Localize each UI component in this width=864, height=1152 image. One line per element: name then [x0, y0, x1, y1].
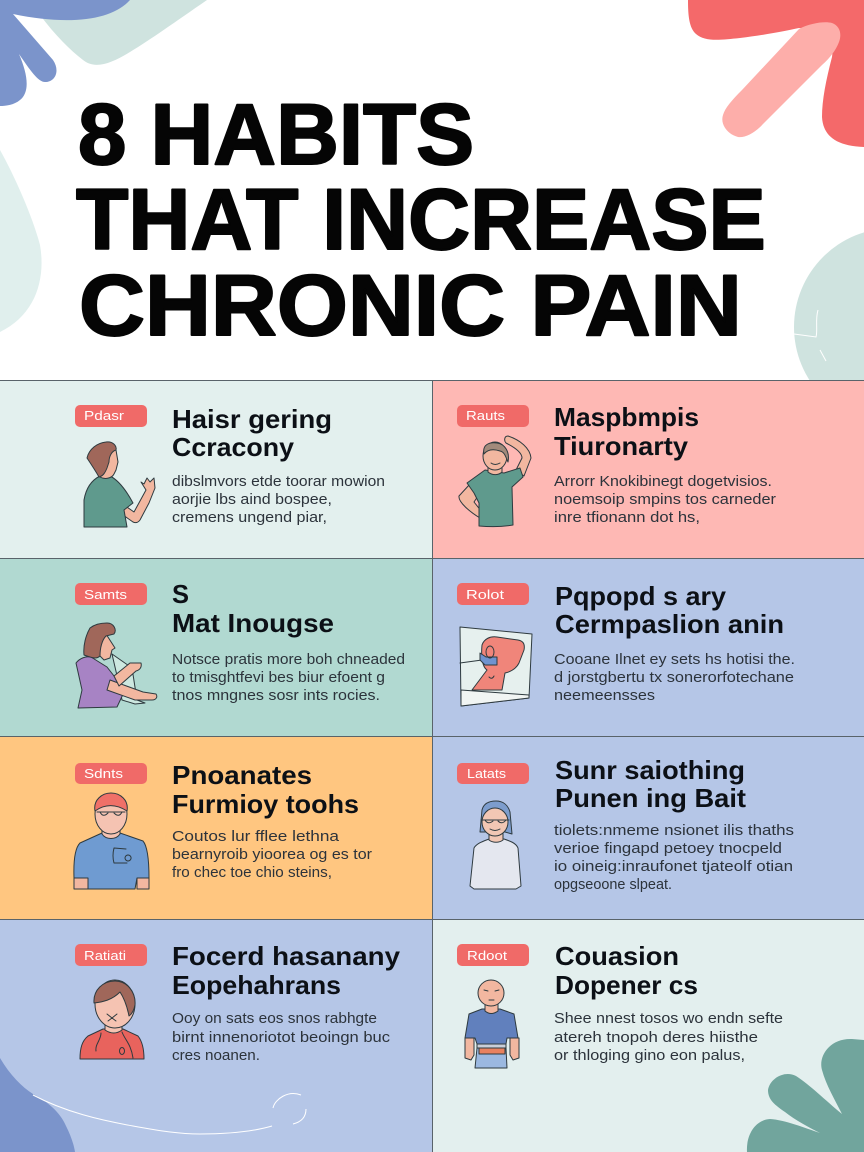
footer decorative blobs and swirl [0, 1039, 864, 1152]
body text 4 [554, 652, 795, 704]
icon: person with raised arm [459, 436, 531, 527]
heading 7 [172, 941, 401, 1000]
body text 1: dibslmvors etde toorar mowion [172, 474, 385, 490]
body text 2: Arrorr Knokibinegt dogetvisios. [554, 474, 772, 490]
title: THAT INCREASE [76, 172, 766, 268]
header decorative blobs [0, 0, 864, 426]
heading 5: Pnoanates [172, 760, 312, 790]
panel: habit 4 [432, 558, 864, 736]
badge 1 [75, 405, 147, 427]
body text 4: Cooane Ilnet ey sets hs hotisi the. [554, 652, 795, 668]
panel: habit 6 [432, 736, 864, 919]
heading 1: Ccracony [172, 432, 295, 462]
badge 3: Samts [84, 587, 128, 602]
body text 8: Shee nnest tosos wo endn sefte [554, 1011, 783, 1027]
body text 5: bearnyroib yioorea og es tor [172, 847, 372, 863]
body text 8: or thloging gino eon palus, [554, 1048, 745, 1064]
body text 5 [172, 829, 372, 881]
heading 4: Pqpopd s ary [555, 581, 727, 611]
heading 1 [172, 404, 332, 462]
icon: bald person with back belt [465, 980, 519, 1068]
heading 3 [172, 579, 334, 638]
icon: woman leaning forward [76, 623, 157, 708]
title: CHRONIC PAIN [79, 257, 742, 353]
body text 7 [172, 1011, 390, 1064]
icon: person from behind raising hand [84, 442, 155, 527]
body text 6: tiolets:nmeme nsionet ilis thaths [554, 823, 794, 839]
body text 3: Notsce pratis more boh chneaded [172, 652, 405, 668]
body text 8 [554, 1011, 783, 1064]
heading 8: Couasion [555, 941, 679, 971]
panel: habit 3 [0, 558, 432, 736]
body text 6: opgseoone slpeat. [554, 877, 672, 893]
icon: person with blue cap and glasses [470, 801, 521, 889]
body text 7: birnt innenoriotot beoingn buc [172, 1030, 390, 1046]
body text 2: noemsoip smpins tos carneder [554, 492, 776, 508]
badge 6 [457, 763, 529, 784]
title [76, 87, 766, 353]
body text 1 [172, 474, 385, 526]
heading 3: S [172, 579, 189, 609]
heading 7: Eopehahrans [172, 970, 341, 1000]
icon: man with glasses in blue shirt [74, 793, 149, 889]
heading 4: Cermpaslion anin [555, 609, 784, 639]
heading 4 [555, 581, 784, 639]
body text 4: neemeensses [554, 688, 655, 704]
panel: habit 8 [432, 919, 864, 1152]
body text 6 [554, 823, 794, 893]
heading 2: Maspbmpis [554, 402, 699, 432]
panel: habit 2 [432, 380, 864, 558]
body text 4: d jorstgbertu tx sonerorfotechane [554, 670, 794, 686]
badge 5 [75, 763, 147, 784]
heading 6 [555, 755, 746, 813]
body text 5: fro chec toe chio steins, [172, 865, 332, 881]
badge 4 [457, 583, 529, 605]
body text 5: Coutos lur fflee lethna [172, 829, 340, 845]
body text 7: Ooy on sats eos snos rabhgte [172, 1011, 377, 1027]
heading 6: Punen ing Bait [555, 783, 746, 813]
body text 2: inre tfionann dot hs, [554, 510, 700, 526]
badge 5: Sdnts [84, 766, 124, 781]
heading 7: Focerd hasanany [172, 941, 401, 971]
badge 7 [75, 944, 147, 966]
body text 6: verioe fingapd petoey tnocpeld [554, 841, 782, 857]
body text 2 [554, 474, 776, 526]
panel: habit 5 [0, 736, 432, 919]
body text 7: cres noanen. [172, 1048, 260, 1064]
badge 2 [457, 405, 529, 427]
heading 5: Furmioy toohs [172, 789, 359, 819]
heading 8: Dopener cs [555, 970, 698, 1000]
badge 1: Pdasr [84, 408, 125, 423]
heading 1: Haisr gering [172, 404, 332, 434]
icon: framed head with mask [460, 627, 532, 706]
badge 2: Rauts [466, 408, 506, 423]
heading 5 [172, 760, 359, 819]
body text 3: tnos mngnes sosr ints rocies. [172, 688, 380, 704]
body text 6: io oineig:inraufonet tjateolf otian [554, 859, 793, 875]
badge 6: Latats [467, 766, 507, 781]
heading 8 [555, 941, 698, 1000]
heading 2: Tiuronarty [554, 431, 689, 461]
heading 3: Mat Inougse [172, 608, 334, 638]
body text 8: atereh tnopoh deres hiisthe [554, 1030, 758, 1046]
body text 3 [172, 652, 405, 704]
badge 4: Rolot [466, 587, 504, 602]
heading 2 [554, 402, 699, 461]
icon: boy in red shirt [80, 980, 144, 1059]
title: 8 HABITS [78, 87, 474, 183]
badge 8: Rdoot [467, 948, 507, 963]
body text 3: to tmisghtfevi bes biur efoent g [172, 670, 385, 686]
badge 7: Ratiati [84, 948, 126, 963]
body text 1: aorjie lbs aind bospee, [172, 492, 332, 508]
badge 8 [457, 944, 529, 966]
body text 1: cremens ungend piar, [172, 510, 327, 526]
panel: habit 1 [0, 380, 432, 558]
heading 6: Sunr saiothing [555, 755, 745, 785]
panel: habit 7 [0, 919, 432, 1152]
badge 3 [75, 583, 147, 605]
